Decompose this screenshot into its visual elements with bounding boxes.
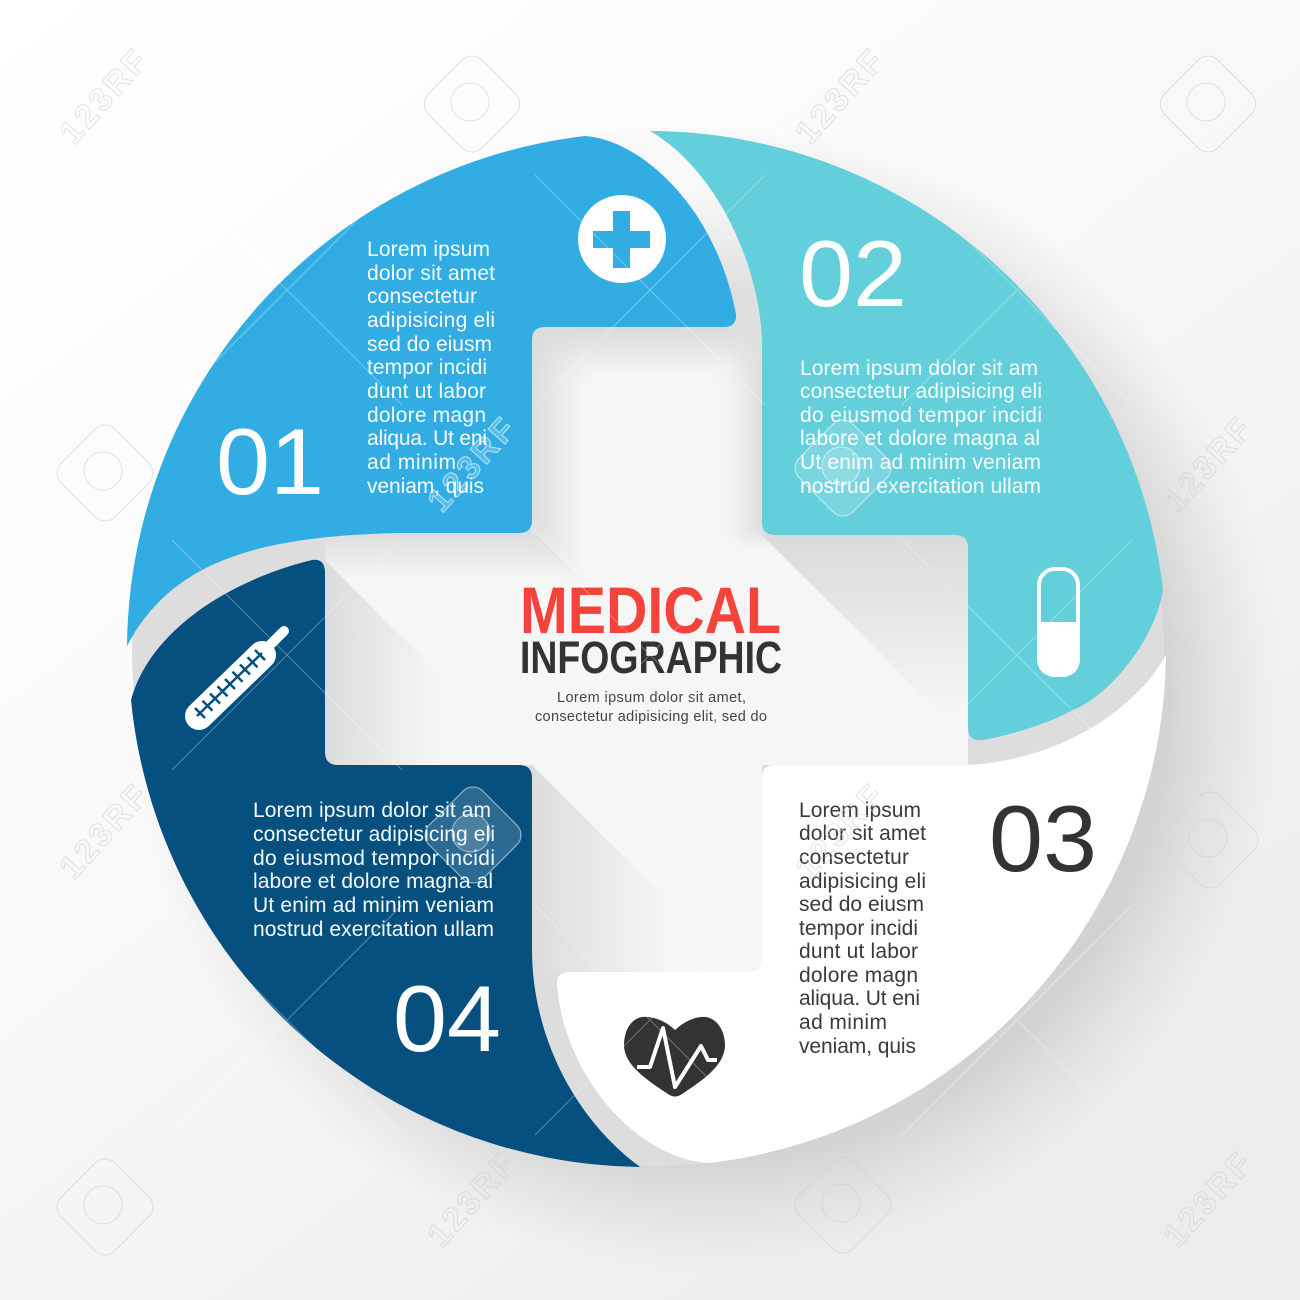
text block 01: veniam, quis [367, 475, 484, 498]
diagonal shadow of segment 04 side [325, 560, 404, 765]
segment 02: teal [650, 131, 1163, 740]
center title [520, 573, 782, 725]
gap between segments 01 and 02 [585, 128, 762, 345]
icon: heart with pulse [624, 1017, 725, 1096]
text block 04: labore et dolore magna al [253, 870, 493, 893]
diagonal shadow of segment 02 [762, 535, 968, 664]
text block 01: sed do eiusm [367, 333, 492, 356]
segment 01: blue [127, 136, 736, 646]
soft shadow of the circle [133, 125, 1283, 1275]
text block 03: dunt ut labor [799, 940, 918, 963]
heading: medical: MEDICAL [520, 573, 781, 647]
text block 03: tempor incidi [799, 917, 918, 940]
text block 01: consectetur [367, 285, 477, 308]
number 01: 01 [216, 409, 324, 514]
segment 03: white [557, 655, 1166, 1163]
text block 03: Lorem ipsum [799, 799, 921, 822]
text block 01: dolore magn [367, 404, 486, 427]
icon: medical plus [578, 195, 666, 283]
text block 02: Lorem ipsum dolor sit am [800, 357, 1038, 380]
number 02: 02 [799, 221, 907, 326]
watermark text stamps: 123RF [420, 411, 522, 519]
segment 04: dark blue [131, 560, 640, 1167]
text block 04: Ut enim ad minim veniam [253, 894, 494, 917]
text block 02: nostrud exercitation ullam [800, 475, 1041, 498]
text block 01: dunt ut labor [367, 380, 486, 403]
diagonal shadow of segment 04 bottom [532, 765, 626, 972]
text block 01: tempor incidi [367, 356, 487, 379]
text block 04: nostrud exercitation ullam [253, 918, 494, 941]
watermark text stamps: 123RF [1156, 411, 1258, 519]
text block 03: dolore magn [799, 964, 918, 987]
text block 04: Lorem ipsum dolor sit am [253, 799, 491, 822]
watermark text stamps: 123RF [420, 1146, 522, 1254]
text block 03: consectetur [799, 846, 909, 869]
text block 01: aliqua. Ut eni [367, 427, 487, 450]
text block 03: ad minim [799, 1011, 887, 1034]
text block 03: sed do eiusm [799, 893, 924, 916]
text block 02 [800, 357, 1042, 498]
base disc forming gaps between segments [132, 134, 1164, 1166]
text block 01: dolor sit amet [367, 262, 495, 285]
watermark cross lines [172, 175, 1132, 1135]
text block 02: consectetur adipisicing eli [800, 380, 1042, 403]
watermark text stamps: 123RF [1156, 1146, 1258, 1254]
text block 04: do eiusmod tempor incidi [253, 847, 495, 870]
text block 01 [367, 238, 495, 498]
text block 01: adipisicing eli [367, 309, 495, 332]
text block 04: consectetur adipisicing eli [253, 823, 495, 846]
subtitle: consectetur adipisicing elit, sed do [535, 709, 767, 725]
number 04: 04 [393, 966, 501, 1071]
soft shadows in top arm [532, 327, 769, 555]
number 03: 03 [989, 786, 1097, 891]
icon: thermometer [195, 631, 284, 718]
text block 02: Ut enim ad minim veniam [800, 451, 1041, 474]
text block 03 [799, 799, 926, 1058]
watermark text stamps: 123RF [52, 778, 154, 886]
text block 03: dolor sit amet [799, 822, 926, 845]
subtitle [535, 690, 767, 725]
text block 02: labore et dolore magna al [800, 427, 1040, 450]
icon: pill capsule [1037, 569, 1080, 677]
text block 02: do eiusmod tempor incidi [800, 404, 1042, 427]
text block 04 [253, 799, 495, 941]
watermark text stamps: 123RF [788, 778, 890, 886]
text block 01: ad minim [367, 451, 456, 474]
watermark text stamps: 123RF [788, 43, 890, 151]
text block 03: adipisicing eli [799, 870, 926, 893]
central cross background [325, 346, 968, 972]
watermark text stamps: 123RF [52, 43, 154, 151]
text block 03: veniam, quis [799, 1035, 916, 1058]
text block 03: aliqua. Ut eni [799, 987, 920, 1010]
shadow under segment 01 left arm [325, 533, 560, 564]
subtitle: Lorem ipsum dolor sit amet, [557, 690, 746, 706]
text block 01: Lorem ipsum [367, 238, 490, 261]
heading: infographic: INFOGRAPHIC [520, 632, 782, 683]
